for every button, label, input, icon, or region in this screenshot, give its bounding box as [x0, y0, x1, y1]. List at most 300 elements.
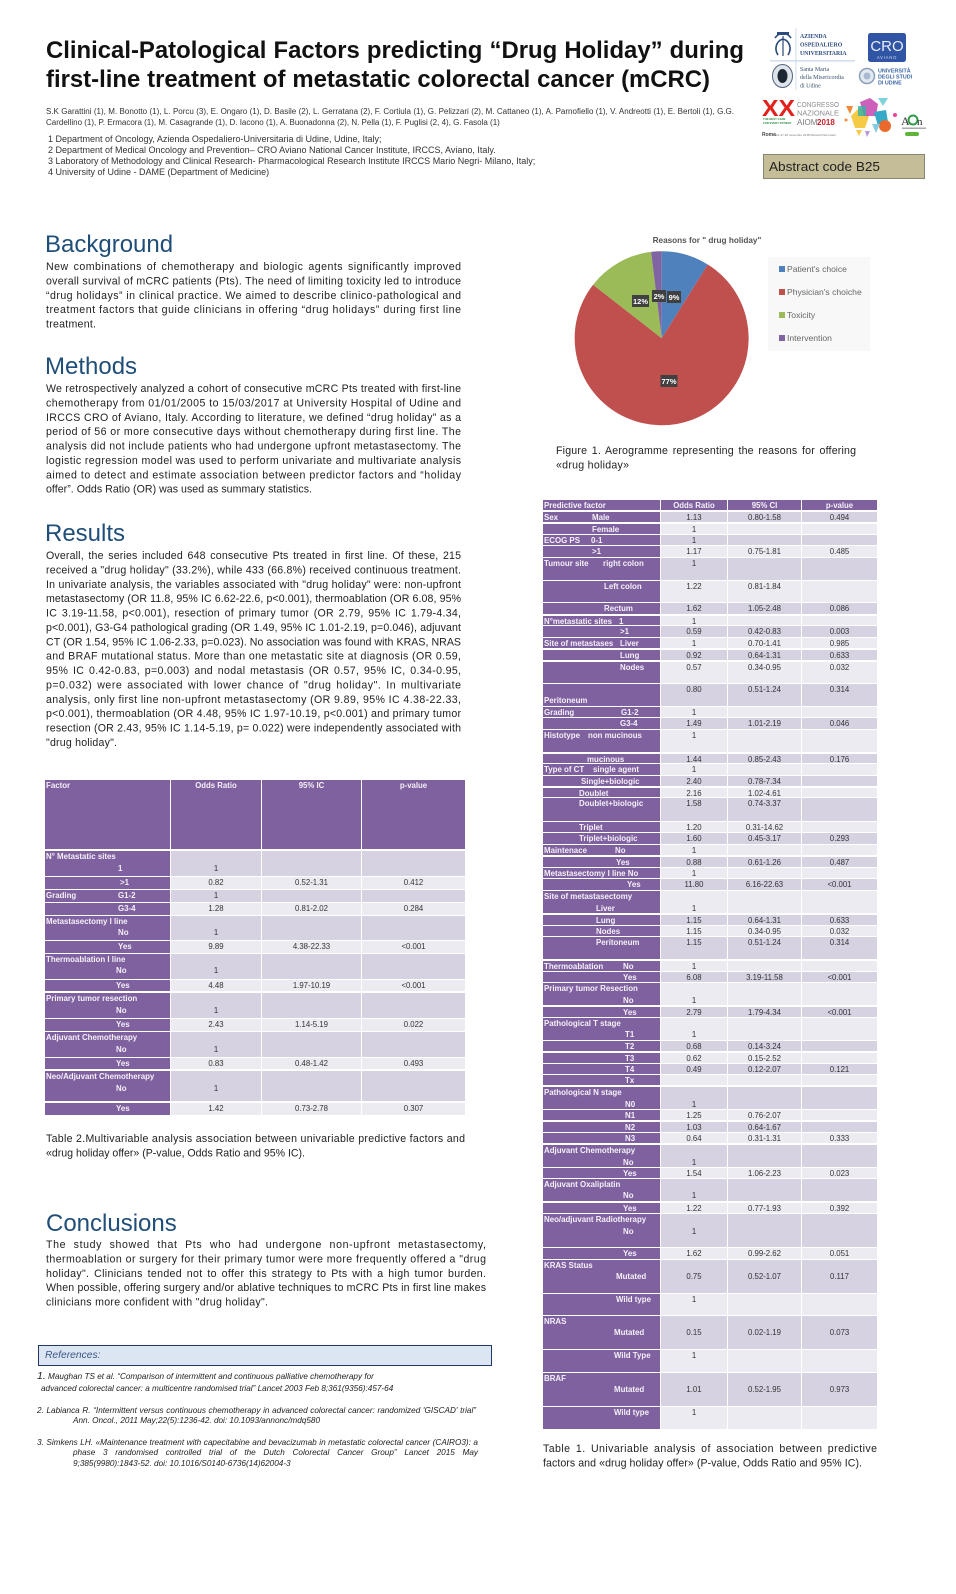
table 1: univariable analysis: 1 — [692, 617, 696, 626]
table 1: univariable analysis: 1 — [692, 869, 696, 878]
heading: Methods: Methods — [45, 353, 137, 380]
table 1: univariable analysis: Wild Type — [614, 1351, 651, 1360]
logo: XX Congresso Nazionale AIOM 2018: 2018 — [817, 118, 835, 127]
table 1: univariable analysis: Nodes — [596, 927, 620, 936]
table 2: multivariable analysis: 1.97-10.19 — [293, 981, 330, 990]
data label 2% — [652, 290, 666, 302]
affiliations: 1 Department of Oncology, Azienda Ospedaliero-Universitaria di Udine, Udine, Italy; — [48, 134, 382, 144]
title — [46, 37, 744, 93]
table 1: univariable analysis: 0.34-0.95 — [748, 927, 781, 936]
text: Conclusions — [46, 1239, 486, 1309]
logo: XX Congresso Nazionale AIOM 2018 — [762, 95, 840, 138]
table 1: univariable analysis: ECOG PS — [544, 536, 580, 545]
table 1: univariable analysis: 6.08 — [686, 973, 702, 982]
table 2: multivariable analysis: 0.73-2.78 — [295, 1104, 328, 1113]
table 1: univariable analysis: <0.001 — [827, 973, 852, 982]
table 2: multivariable analysis: No — [116, 966, 127, 975]
table 1: univariable analysis: 1.60 — [686, 834, 702, 843]
table 1: univariable analysis: 0.15 — [686, 1328, 702, 1337]
table 1: univariable analysis: Grading — [544, 708, 574, 717]
table 1: univariable analysis: 1 — [692, 962, 696, 971]
text: Methods: IRCCS CRO of Aviano, Italy. According to literature, we defined “drug holiday” as a — [46, 412, 461, 424]
caption: figure 1 — [556, 445, 856, 472]
table 1: univariable analysis: Tumour site — [544, 559, 589, 568]
table 1: univariable analysis: 0.74-3.37 — [748, 799, 781, 808]
table 1: univariable analysis: Yes — [627, 880, 641, 889]
table 1: univariable analysis: Yes — [623, 1169, 637, 1178]
table 2: multivariable analysis: Metastasectomy I line — [46, 917, 128, 926]
table 1: univariable analysis: >1 — [592, 547, 601, 556]
text: Results: p=0.032) were associated with lower chance of "drug holiday". In multivariate — [46, 680, 461, 692]
caption: table 1: factors and «drug holiday offer» (P-value, Odds Ratio and 95% IC). — [543, 1458, 862, 1470]
text: Results: and BRAF mutational status. More than one metastatic site at diagnosis (OR 0.59, — [46, 651, 460, 663]
table 1: univariable analysis: Doublet+biologic — [579, 799, 643, 808]
table 1: univariable analysis: Doublet — [579, 789, 608, 798]
logo: Universita degli Studi di Udine — [860, 68, 913, 86]
text: Results: received a "drug holiday" (33.2%), while 433 (66.8%) received continuous treatment. — [46, 565, 460, 577]
table 1: univariable analysis: 0.52-1.07 — [748, 1272, 781, 1281]
table 2: multivariable analysis: 0.493 — [404, 1059, 423, 1068]
table 1: univariable analysis: 0.02-1.19 — [748, 1328, 781, 1337]
table 2: multivariable analysis: <0.001 — [401, 981, 426, 990]
table 1: univariable analysis: Female — [592, 525, 619, 534]
table 2: multivariable analysis: 0.48-1.42 — [295, 1059, 328, 1068]
table 1: univariable analysis: 1.15 — [686, 916, 702, 925]
logo: Azienda Ospedaliero Universitaria: UNIVERSITARIA — [800, 51, 847, 57]
abstract code box — [763, 154, 925, 179]
logo: AIOM: n — [917, 116, 923, 128]
table 1: univariable analysis: No — [615, 846, 626, 855]
table 2: multivariable analysis: Odds Ratio — [195, 781, 237, 790]
references list: 9;385(9980):1843-52. doi: 10.1016/S0140-6736(14)62004-3 — [73, 1459, 291, 1468]
slice: intervention 2% — [651, 251, 662, 338]
legend: Physician's choiche — [787, 287, 862, 297]
table 2: multivariable analysis: No — [118, 928, 129, 937]
table 2: multivariable analysis: 1 — [214, 1045, 218, 1054]
table 1: univariable analysis: 0.633 — [830, 916, 849, 925]
table 1: univariable analysis: 1 — [692, 1227, 696, 1236]
table 1: univariable analysis: 1.15 — [686, 927, 702, 936]
caption: table 2: Table 2.Multivariable analysis association between univariable predictive factors and — [46, 1133, 465, 1145]
table 1: univariable analysis: Lung — [596, 916, 615, 925]
data label 9%: 9% — [669, 293, 680, 302]
table 1: univariable analysis: 0.31-14.62 — [746, 823, 783, 832]
table 1: univariable analysis: Pathological T stage — [544, 1019, 621, 1028]
table 2: multivariable analysis: 0.412 — [404, 878, 423, 887]
table 1: univariable analysis: 0.51-1.24 — [748, 685, 781, 694]
table 1: univariable analysis: 95% CI — [752, 501, 777, 510]
caption: figure 1: Figure 1. Aerogramme representing the reasons for offering — [556, 445, 856, 457]
table 1: univariable analysis: 1 — [692, 1100, 696, 1109]
logo: XX Congresso Nazionale AIOM 2018: XX — [762, 95, 796, 121]
table 1: univariable analysis: Triplet — [579, 823, 603, 832]
table 1: univariable analysis: 1.06-2.23 — [748, 1169, 781, 1178]
table 1: univariable analysis: 1.05-2.48 — [748, 604, 781, 613]
table 1: univariable analysis: Yes — [623, 1249, 637, 1258]
table 1: univariable analysis: 1 — [692, 1295, 696, 1304]
table 2: multivariable analysis: G1-2 — [118, 891, 136, 900]
table 1: univariable analysis: 2.40 — [686, 777, 702, 786]
table 2: multivariable analysis: Thermoablation I line — [46, 955, 125, 964]
chart title: Reasons for " drug holiday" — [653, 236, 761, 245]
table 1: univariable analysis: T1 — [625, 1030, 634, 1039]
table 1: univariable analysis: 1.17 — [686, 547, 702, 556]
table 1: univariable analysis: N°metastatic sites — [544, 617, 612, 626]
table 1: univariable analysis: 0.314 — [830, 938, 849, 947]
table 1: univariable analysis: Thermoablation — [544, 962, 603, 971]
heading: Results: Results — [45, 520, 125, 547]
table 1: univariable analysis: 0.293 — [830, 834, 849, 843]
pie chart: reasons for drug holiday — [574, 236, 862, 426]
table 2: multivariable analysis: Yes — [116, 1104, 130, 1113]
table 1: univariable analysis: 1.01 — [686, 1385, 702, 1394]
table 1: univariable analysis: 0.70-1.41 — [748, 639, 781, 648]
title: Clinical-Patological Factors predicting “Drug Holiday” during — [46, 37, 744, 64]
table 1: univariable analysis: N0 — [625, 1100, 635, 1109]
table 1: univariable analysis: 0.52-1.95 — [748, 1385, 781, 1394]
table 1: univariable analysis: 0.64-1.31 — [748, 916, 781, 925]
table 1: univariable analysis: 0.62 — [686, 1054, 702, 1063]
authors: S.K Garattini (1), M. Bonotto (1), L. Porcu (3), E. Ongaro (1), D. Basile (2), L. Gerratana (2), F. Cortiula (1), G. Pelizzari (2), M. Cattaneo (1), A. Parnofiello (1), V. Andreotti (1), E. Bertoli (1), G.G. — [46, 107, 734, 116]
table 1: univariable analysis: 0.15-2.52 — [748, 1054, 781, 1063]
table 1: univariable analysis: 0.117 — [830, 1272, 849, 1281]
references list: 2. Labianca R. “Intermittent versus continuous chemotherapy in advanced colorectal cancer: randomized 'GISCAD' trial” — [37, 1406, 476, 1415]
table 1: univariable analysis: 0.99-2.62 — [748, 1249, 781, 1258]
table 1: univariable analysis: 1.02-4.61 — [748, 789, 781, 798]
table 2: multivariable analysis: Grading — [46, 891, 76, 900]
text: Results: p<0.001), thermoablation (OR 4.48, 95% IC 1.97-10.19, p<0.001) and primary tumor — [46, 709, 461, 721]
text: Conclusions: holiday". Clinicians tended not to offer this strategy to Pts with a high tumor burden. — [46, 1268, 486, 1280]
table 1: univariable analysis: 0.64-1.31 — [748, 651, 781, 660]
table 1: univariable analysis: 0.985 — [830, 639, 849, 648]
affiliations: 3 Laboratory of Methodology and Clinical Research- Pharmacological Research Institute IRCCS Mario Negri- Milano, Italy; — [48, 156, 535, 166]
table 1: univariable analysis: N3 — [625, 1134, 635, 1143]
table 1: univariable analysis: 1.44 — [686, 755, 702, 764]
table 1: univariable analysis: Yes — [623, 1008, 637, 1017]
table 1: univariable analysis: 1.49 — [686, 719, 702, 728]
table 1: univariable analysis: mucinous — [587, 755, 624, 764]
table 2: multivariable analysis: 4.38-22.33 — [293, 942, 330, 951]
table 1: univariable analysis: 6.16-22.63 — [746, 880, 783, 889]
table 1: univariable analysis: 0.75 — [686, 1272, 702, 1281]
logo: CRO Aviano — [868, 33, 906, 62]
table 1: univariable analysis: Tx — [625, 1076, 634, 1085]
table 1: univariable analysis: 1 — [619, 617, 623, 626]
logo: colourful polygons — [844, 98, 897, 137]
table 1: univariable analysis: Metastasectomy I line No — [544, 869, 638, 878]
table 1: univariable analysis: 1 — [692, 536, 696, 545]
logo: Universita degli Studi di Udine: DI UDINE — [878, 80, 902, 86]
table 2: multivariable analysis: 0.81-2.02 — [295, 904, 328, 913]
table 1: univariable analysis: 1.13 — [686, 513, 702, 522]
table 1: univariable analysis: 1 — [692, 525, 696, 534]
authors: Cardellino (1), P. Ermacora (1), M. Casagrande (1), D. Iacono (1), A. Buonadonna (2), N. Pella (1), F. Puglisi (2, 4), G. Fasola (1) — [46, 118, 500, 127]
table 1: univariable analysis: right colon — [603, 559, 644, 568]
table 1: univariable analysis: 0.12-2.07 — [748, 1065, 781, 1074]
text: Results: CT (OR 1.54, 95% IC 1.06-2.33, p=0.023). No association was found with KRAS, NRAS — [46, 637, 460, 649]
text: Conclusions: thermoablation or surgery for their primary tumor were more frequently offered a "drug — [46, 1254, 486, 1266]
table 1: univariable analysis: 0.49 — [686, 1065, 702, 1074]
table 2: multivariable analysis: 1 — [118, 864, 122, 873]
table 1: univariable analysis: BRAF — [544, 1374, 566, 1383]
table 1: univariable analysis: 0.032 — [830, 927, 849, 936]
table 1: univariable analysis: 0.333 — [830, 1134, 849, 1143]
table 1: univariable analysis: 0.121 — [830, 1065, 849, 1074]
table 1: univariable analysis: No — [623, 962, 634, 971]
table 1: univariable analysis: 0.032 — [830, 663, 849, 672]
table 1: univariable analysis: 2.79 — [686, 1008, 702, 1017]
legend: Intervention — [787, 333, 832, 343]
table 2: multivariable analysis: <0.001 — [401, 942, 426, 951]
legend — [768, 257, 870, 351]
logo: XX Congresso Nazionale AIOM 2018: NAZIONALE — [797, 110, 839, 118]
table 1: univariable analysis: 1.22 — [686, 1204, 702, 1213]
text: Background: “drug holidays” in clinical practice. We aimed to describe clinico-pathological and — [46, 290, 461, 302]
table 1: univariable analysis: 0.64 — [686, 1134, 702, 1143]
text: Results: In univariate analysis, the variables associated with "drug holiday" were: non-upfront — [46, 579, 461, 591]
table 1: univariable analysis: 1 — [692, 996, 696, 1005]
text: Methods — [46, 383, 461, 496]
table 1: univariable analysis: 0.51-1.24 — [748, 938, 781, 947]
table 2: multivariable analysis: 9.89 — [208, 942, 224, 951]
table 1: univariable analysis: N2 — [625, 1123, 635, 1132]
table 2: multivariable analysis: Yes — [116, 981, 130, 990]
table 2: multivariable analysis: No — [116, 1084, 127, 1093]
table 2: multivariable analysis: >1 — [120, 878, 129, 887]
table 2: multivariable analysis: p-value — [400, 781, 427, 790]
table 1: univariable analysis: 0.85-2.43 — [748, 755, 781, 764]
text: Background — [46, 261, 461, 331]
table 2: multivariable analysis: 0.307 — [404, 1104, 423, 1113]
table 1: univariable analysis: 1.20 — [686, 823, 702, 832]
table 1: univariable analysis: 0.086 — [830, 604, 849, 613]
text: Conclusions: The study showed that Pts who had undergone non-upfront metastasectomy, — [46, 1239, 486, 1251]
table 2: multivariable analysis — [45, 780, 465, 1115]
text: Results: resection (OR 2.43, 95% IC 1.14-5.19, p= 0.022) were independently associated with — [46, 723, 461, 735]
table 2: multivariable analysis: Neo/Adjuvant Chemotherapy — [46, 1072, 154, 1081]
table 1: univariable analysis: G1-2 — [621, 708, 639, 717]
table 1: univariable analysis: 1 — [692, 708, 696, 717]
table 2: multivariable analysis: No — [116, 1045, 127, 1054]
table 1: univariable analysis: G3-4 — [620, 719, 638, 728]
table 1: univariable analysis: 0.485 — [830, 547, 849, 556]
table 1: univariable analysis: 0-1 — [591, 536, 602, 545]
table 1: univariable analysis: 1 — [692, 1408, 696, 1417]
table 1: univariable analysis: 0.023 — [830, 1169, 849, 1178]
table 1: univariable analysis: 0.176 — [830, 755, 849, 764]
references list: 1. Maughan TS et al. “Comparison of intermittent and continuous palliative chemotherapy for — [37, 1370, 374, 1382]
table 1: univariable analysis: 1.79-4.34 — [748, 1008, 781, 1017]
table 1: univariable analysis: 1.03 — [686, 1123, 702, 1132]
text: Methods: chemotherapy from 01/01/2005 to 15/03/2017 at University Hospital of Udine and — [46, 398, 461, 410]
text: Results — [46, 550, 461, 749]
table 1: univariable analysis: 0.61-1.26 — [748, 858, 781, 867]
table 1: univariable analysis: 0.45-3.17 — [748, 834, 781, 843]
table 2: multivariable analysis: 0.82 — [208, 878, 224, 887]
table 2: multivariable analysis: Primary tumor resection — [46, 994, 137, 1003]
table 1: univariable analysis: Pathological N stage — [544, 1088, 622, 1097]
table 1: univariable analysis: 1 — [692, 765, 696, 774]
table 1: univariable analysis: 0.073 — [830, 1328, 849, 1337]
logos — [762, 28, 926, 138]
data label 2%: 2% — [654, 292, 665, 301]
table 1: univariable analysis: Adjuvant Chemotherapy — [544, 1146, 635, 1155]
table 1: univariable analysis: 0.92 — [686, 651, 702, 660]
slice: physician's choice 77% — [575, 264, 749, 425]
table 2: multivariable analysis: 2.43 — [208, 1020, 224, 1029]
table 1: univariable analysis: Lung — [620, 651, 639, 660]
table 1: univariable analysis: Mutated — [614, 1328, 644, 1337]
table 1: univariable analysis: 2.16 — [686, 789, 702, 798]
abstract code box: Abstract code B25 — [769, 160, 880, 174]
table 1: univariable analysis: Yes — [616, 858, 630, 867]
table 1: univariable analysis: 0.77-1.93 — [748, 1204, 781, 1213]
table 1: univariable analysis: 0.80-1.58 — [748, 513, 781, 522]
table 1: univariable analysis: 1 — [692, 1191, 696, 1200]
table 1: univariable analysis: Primary tumor Resection — [544, 984, 638, 993]
table 2: multivariable analysis: 1.14-5.19 — [295, 1020, 328, 1029]
references list — [37, 1370, 478, 1468]
table 2: multivariable analysis: 95% IC — [299, 781, 324, 790]
table 1: univariable analysis: Peritoneum — [544, 696, 587, 705]
text: Methods: analysis did not include patients who had undergone upfront metastasectomy. The — [46, 441, 461, 453]
table 1: univariable analysis: 0.494 — [830, 513, 849, 522]
table 2: multivariable analysis: Yes — [116, 1020, 130, 1029]
table 1: univariable analysis: 0.003 — [830, 627, 849, 636]
text: Results: metastasectomy (OR 11.8, 95% IC 6.62-22.6, p<0.001), thermoablation (OR 6.08, 95% — [46, 594, 461, 606]
legend: Patient's choice — [787, 264, 847, 274]
table 1: univariable analysis: 0.42-0.83 — [748, 627, 781, 636]
table 2: multivariable analysis: G3-4 — [118, 904, 136, 913]
table 1: univariable analysis: No — [623, 1227, 634, 1236]
table 1: univariable analysis: Left colon — [604, 582, 642, 591]
table 2: multivariable analysis: No — [116, 1006, 127, 1015]
table 1: univariable analysis: 0.34-0.95 — [748, 663, 781, 672]
table 1: univariable analysis: Nodes — [620, 663, 644, 672]
table 1: univariable analysis: Adjuvant Oxaliplatin — [544, 1180, 620, 1189]
references list: advanced colorectal cancer: a multicentre randomised trial” Lancet 2003 Feb 8;361(9356):457-64 — [41, 1384, 393, 1393]
table 1: univariable analysis: Male — [592, 513, 610, 522]
table 1: univariable analysis: Wild type — [614, 1408, 649, 1417]
table 1: univariable analysis: No — [623, 996, 634, 1005]
table 1: univariable analysis: 1 — [692, 639, 696, 648]
table 1: univariable analysis: 0.75-1.81 — [748, 547, 781, 556]
caption: figure 1: «drug holiday» — [556, 460, 629, 472]
text: Methods: We retrospectively analyzed a cohort of consecutive mCRC Pts treated with first-line — [46, 383, 461, 395]
text: Results: p<0.001), G3-G4 pathological grading (OR 1.49, 95% IC 1.01-2.19, p=0.046), adjuvant — [46, 622, 461, 634]
data label 77% — [660, 375, 678, 387]
table 1: univariable analysis: 1.62 — [686, 604, 702, 613]
logo: XX Congresso Nazionale AIOM 2018: CONGRESSO — [797, 102, 840, 109]
logo: Santa Maria della Misericordia: della Misericordia — [800, 75, 844, 81]
table 1: univariable analysis: 11.80 — [685, 880, 703, 889]
data label 12%: 12% — [633, 297, 648, 306]
table 1: univariable analysis: 1 — [692, 846, 696, 855]
table 1: univariable analysis: Site of metastasectomy — [544, 892, 632, 901]
text: Methods: aimed to detect and estimate association between predictor factors and “holiday — [46, 470, 461, 482]
logo: Azienda Ospedaliero Universitaria — [770, 28, 855, 90]
table 1: univariable analysis: 1 — [692, 731, 696, 740]
text: Background: treatment. — [46, 319, 96, 331]
table 1: univariable analysis: 1.54 — [686, 1169, 702, 1178]
table 2: multivariable analysis: Yes — [116, 1059, 130, 1068]
table 1: univariable analysis: 0.051 — [830, 1249, 849, 1258]
table 1: univariable analysis: Yes — [623, 973, 637, 982]
table 1: univariable analysis: 0.59 — [686, 627, 702, 636]
table 1: univariable analysis: Odds Ratio — [673, 501, 715, 510]
logo: XX Congresso Nazionale AIOM 2018: FOR EVERY PATIENT — [763, 121, 792, 125]
table 1: univariable analysis: 0.14-3.24 — [748, 1042, 781, 1051]
table 1: univariable analysis: Mutated — [614, 1385, 644, 1394]
table 1: univariable analysis: 1 — [692, 559, 696, 568]
table 2: multivariable analysis: Factor — [46, 781, 70, 790]
table 1: univariable analysis: T2 — [625, 1042, 634, 1051]
authors — [46, 107, 734, 127]
table 1: univariable analysis: 0.78-7.34 — [748, 777, 781, 786]
table 2: multivariable analysis: 1 — [214, 966, 218, 975]
table 1: univariable analysis: 3.19-11.58 — [746, 973, 783, 982]
table 1: univariable analysis: N1 — [625, 1111, 635, 1120]
table 1: univariable analysis: <0.001 — [827, 1008, 852, 1017]
table 1: univariable analysis: Site of metastases — [544, 639, 613, 648]
logo: CRO Aviano: AVIANO — [877, 55, 897, 60]
table 1: univariable analysis: 1.58 — [686, 799, 702, 808]
table 1: univariable analysis: 0.88 — [686, 858, 702, 867]
logo: CRO Aviano: CRO — [870, 38, 904, 55]
text: Results: 95% IC 0.42-0.83, p=0.003) and nodal metastasis (OR 0.57, 95% IC, 0.34-0.95, — [46, 665, 460, 677]
table 1: univariable analysis: 1.25 — [686, 1111, 702, 1120]
table 2: multivariable analysis: 4.48 — [208, 981, 224, 990]
table 1: univariable analysis: Mutated — [616, 1272, 646, 1281]
text: Methods: offer”. Odds Ratio (OR) was used as summary statistics. — [46, 484, 312, 496]
table 1: univariable analysis: single agent — [593, 765, 639, 774]
references list: 3. Simkens LH. «Maintenance treatment with capecitabine and bevacizumab in metastatic colorectal cancer (CAIRO3): a — [37, 1438, 478, 1447]
table 1: univariable analysis: 0.973 — [830, 1385, 849, 1394]
data label 9% — [667, 291, 681, 303]
table 2: multivariable analysis: 1 — [214, 1084, 218, 1093]
slice: toxicity 12% — [593, 252, 662, 338]
text: Background: overall survival of mCRC patients (Pts). The need of limiting toxicity led to introduce — [46, 276, 461, 288]
logo: Santa Maria della Misericordia: Santa Maria — [800, 67, 829, 73]
affiliations: 4 University of Udine - DAME (Department of Medicine) — [48, 167, 269, 177]
table 2: multivariable analysis: 0.022 — [404, 1020, 423, 1029]
logo: Santa Maria della Misericordia: di Udine — [800, 84, 821, 90]
caption: table 2 — [46, 1133, 465, 1160]
table 1: univariable analysis: 0.633 — [830, 651, 849, 660]
table 1: univariable analysis: Sex — [544, 513, 558, 522]
table 1: univariable analysis: Rectum — [604, 604, 633, 613]
data label 12% — [632, 295, 649, 307]
table 2: multivariable analysis: 0.284 — [404, 904, 423, 913]
logo: AIOM: A — [901, 114, 910, 128]
heading: Background: Background — [45, 231, 173, 258]
table 1: univariable analysis: 0.487 — [830, 858, 849, 867]
text: Conclusions: clinicians more confident with "drug holiday". — [46, 1297, 268, 1309]
logo: Universita degli Studi di Udine: UNIVERSITÀ — [878, 68, 911, 74]
text: Background: treatment factors that guide clinicians in offering “drug holidays” during first line — [46, 305, 461, 317]
logo: XX Congresso Nazionale AIOM 2018: THE BEST CARE — [763, 117, 786, 121]
text: Methods: logistic regression model was used to perform univariate and multivariate analysis — [46, 455, 460, 467]
caption: table 1: Table 1. Univariable analysis of association between predictive — [543, 1443, 877, 1455]
table 2: multivariable analysis: 1 — [214, 891, 218, 900]
references heading box — [38, 1345, 492, 1366]
table 1: univariable analysis: 0.392 — [830, 1204, 849, 1213]
references list: Ann. Oncol., 2011 May;22(5):1236-42. doi: 10.1093/annonc/mdq580 — [73, 1416, 320, 1425]
legend: Toxicity — [787, 310, 816, 320]
table 1: univariable analysis: T3 — [625, 1054, 634, 1063]
table 1: univariable analysis: 0.31-1.31 — [748, 1134, 781, 1143]
logo: Azienda Ospedaliero Universitaria: OSPEDALIERO — [800, 42, 843, 48]
